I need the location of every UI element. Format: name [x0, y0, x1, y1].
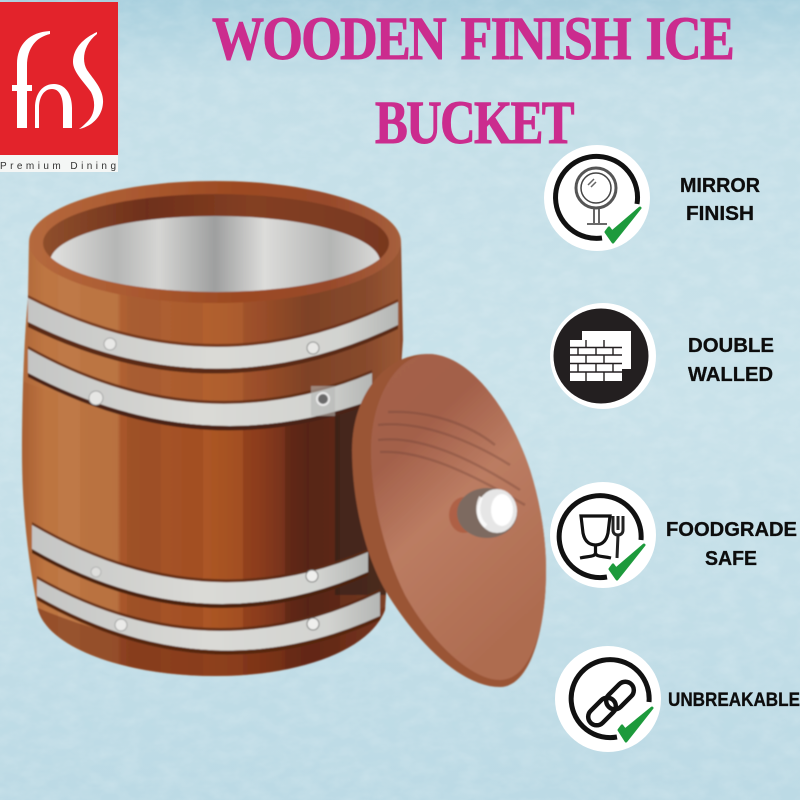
metal band 4 — [37, 576, 380, 655]
label: mirror finish: FINISH — [686, 203, 754, 225]
logo letter S — [73, 32, 103, 129]
logo letter n — [35, 84, 72, 128]
label: mirror finish — [680, 175, 761, 225]
label: double walled: DOUBLE — [688, 335, 774, 357]
barrel rim — [29, 181, 401, 308]
logo: FnS Premium Dining — [0, 2, 118, 172]
lid — [352, 354, 546, 687]
icon: chain link — [555, 646, 661, 752]
feature: unbreakable — [555, 646, 800, 752]
barrel body — [20, 243, 404, 677]
title — [212, 6, 733, 157]
title: BUCKET — [375, 90, 574, 157]
icon: glass and fork — [550, 482, 656, 588]
icon: mirror — [544, 145, 650, 251]
metal band 1 — [28, 295, 398, 374]
label: foodgrade safe: FOODGRADE — [666, 519, 797, 541]
feature: double walled — [550, 303, 774, 409]
metal band 2 — [28, 346, 372, 430]
lid knob — [449, 488, 517, 538]
label: double walled — [688, 335, 774, 386]
metal band 3 — [32, 522, 368, 608]
feature: foodgrade safe — [550, 482, 797, 588]
label: mirror finish: MIRROR — [680, 175, 761, 197]
logo letter f — [12, 31, 50, 128]
logo tagline: Premium Dining — [0, 161, 118, 172]
ice bucket product illustration — [20, 180, 546, 687]
label: foodgrade safe: SAFE — [705, 548, 757, 570]
label: double walled: WALLED — [688, 364, 773, 386]
icon: brick wall — [550, 303, 656, 409]
feature: mirror finish — [544, 145, 761, 251]
label: foodgrade safe — [666, 519, 797, 570]
